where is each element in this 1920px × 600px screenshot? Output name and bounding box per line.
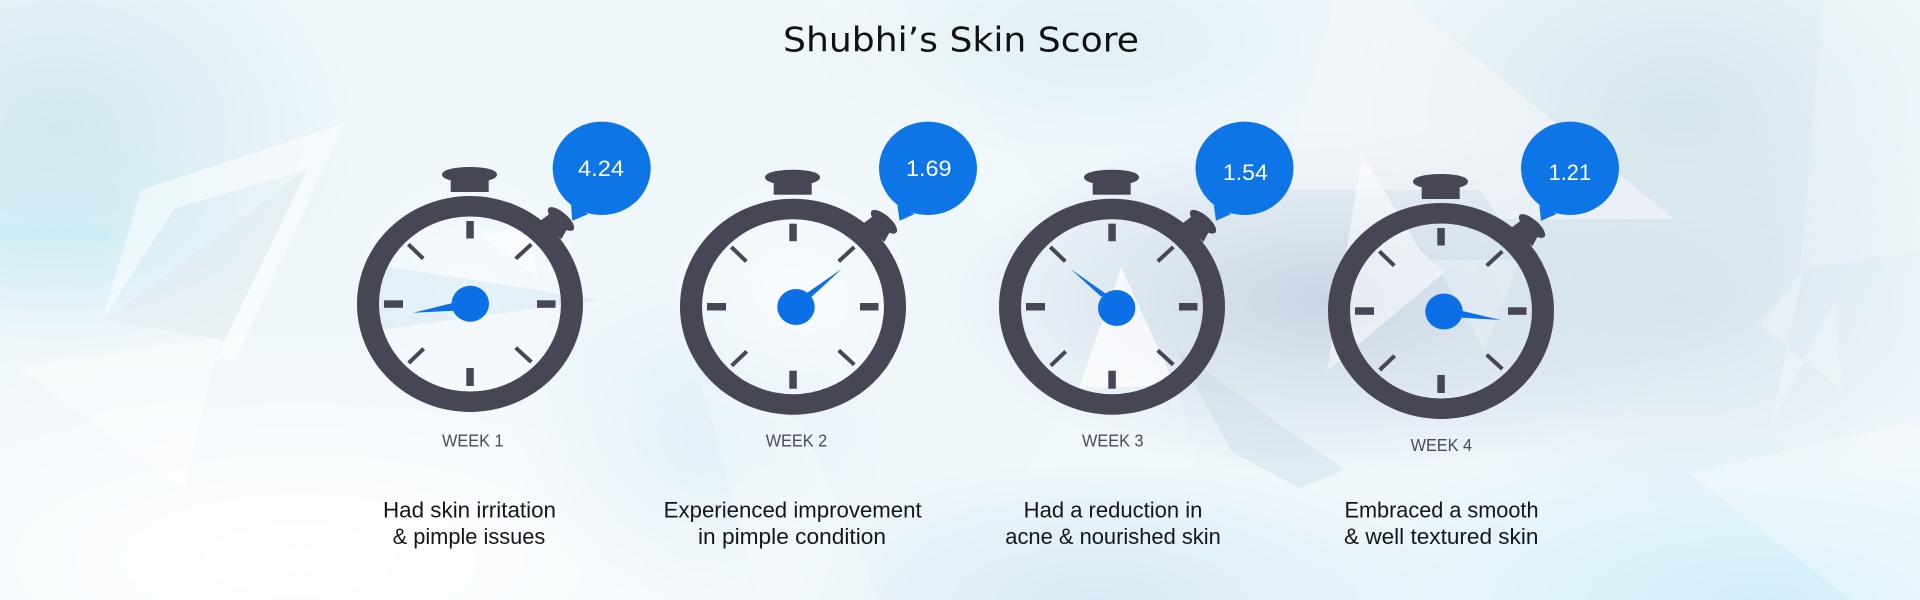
week label: WEEK 2 [766, 431, 827, 451]
stopwatch: week 3 [999, 170, 1225, 415]
speech bubble: score 1.21: 1.21 [1549, 160, 1591, 185]
description: & pimple issues [393, 524, 545, 549]
stopwatch: week 4 [1328, 174, 1554, 419]
panel: week 3 [999, 122, 1294, 549]
speech bubble: score 1.54: 1.54 [1223, 160, 1268, 185]
stopwatch: week 2 [680, 170, 906, 415]
description: acne & nourished skin [1005, 524, 1221, 549]
description: Embraced a smooth [1344, 498, 1538, 522]
speech bubble: score 1.69 [879, 122, 977, 221]
description: Had skin irritation [383, 498, 556, 522]
week label: WEEK 1 [442, 431, 504, 451]
speech bubble: score 1.69: 1.69 [906, 156, 952, 181]
panel: week 2 [664, 122, 977, 549]
speech bubble: score 4.24 [553, 122, 651, 221]
panel: week 1 [357, 122, 651, 549]
week label: WEEK 3 [1082, 431, 1144, 451]
week label: WEEK 4 [1411, 435, 1472, 455]
description: Experienced improvement [664, 498, 922, 522]
speech bubble: score 4.24: 4.24 [578, 156, 624, 181]
title: Shubhi’s Skin Score [783, 20, 1139, 60]
panel: week 4 [1328, 122, 1619, 549]
description: in pimple condition [698, 524, 886, 549]
speech bubble: score 1.54 [1196, 122, 1294, 221]
description: & well textured skin [1344, 524, 1538, 549]
stopwatch: week 1 [357, 167, 583, 412]
speech bubble: score 1.21 [1521, 122, 1619, 221]
description: Had a reduction in [1024, 498, 1202, 522]
